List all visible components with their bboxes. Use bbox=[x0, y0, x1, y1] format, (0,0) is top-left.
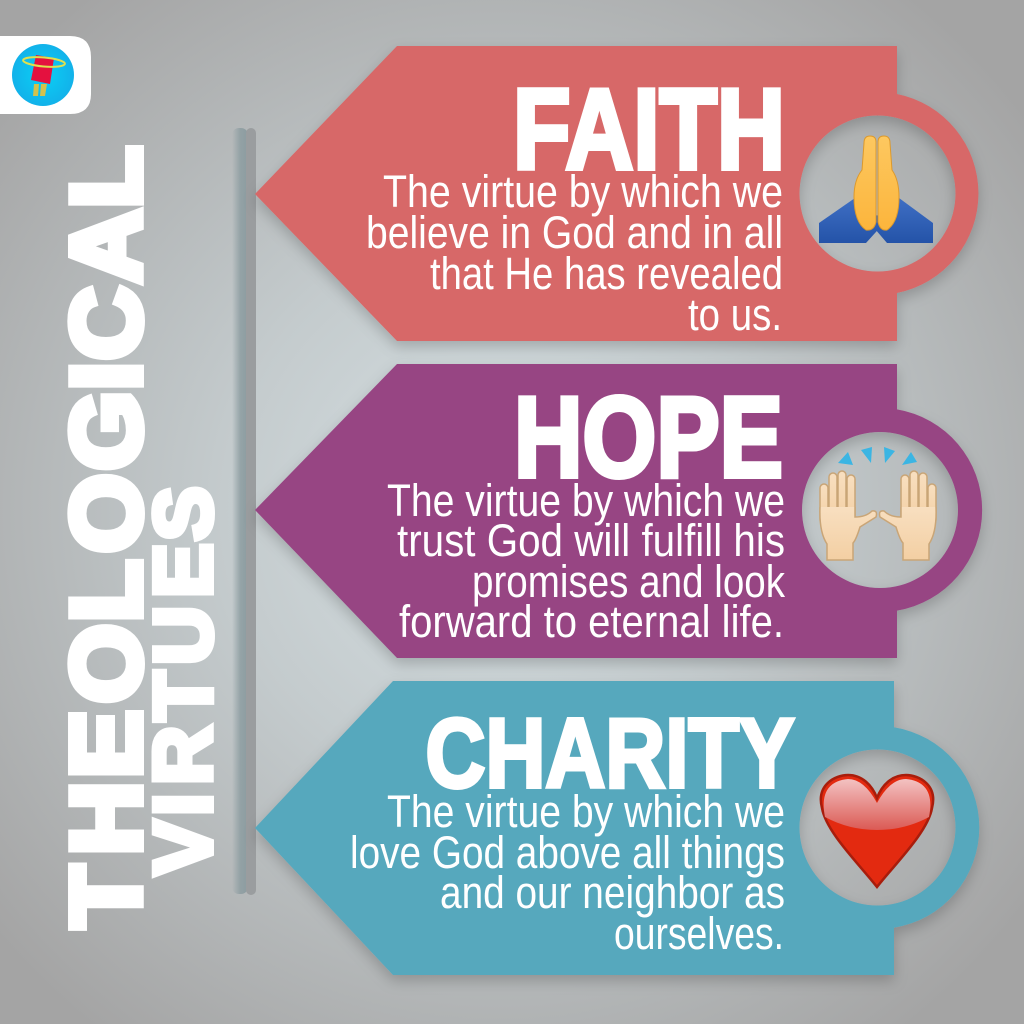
faith description: The virtue by which we bbox=[383, 166, 783, 217]
title line: VIRTUES: VIRTUES bbox=[138, 486, 229, 875]
charity description: The virtue by which we bbox=[387, 786, 785, 837]
hope description: The virtue by which we bbox=[387, 475, 785, 526]
vertical title: THEOLOGICAL VIRTUES bbox=[52, 146, 229, 928]
panel: charity bbox=[255, 681, 979, 975]
faith description: that He has revealed bbox=[430, 248, 783, 299]
heading: hope: HOPE bbox=[514, 374, 783, 502]
title line: THEOLOGICAL: THEOLOGICAL bbox=[52, 146, 162, 928]
hope description: forward to eternal life. bbox=[399, 596, 784, 647]
panel: faith bbox=[255, 46, 978, 341]
faith description: to us. bbox=[688, 289, 782, 340]
sparkles bbox=[838, 447, 917, 465]
charity description: ourselves. bbox=[614, 908, 784, 959]
icon: raised hands bbox=[820, 447, 936, 560]
heading: charity: CHARITY bbox=[426, 698, 794, 808]
charity description: love God above all things bbox=[350, 827, 785, 878]
hope description: trust God will fulfill his bbox=[397, 515, 785, 566]
faith description: believe in God and in all bbox=[366, 207, 783, 258]
faith banner with icon ring bbox=[255, 46, 978, 341]
icon: praying hands bbox=[819, 136, 933, 243]
charity banner with icon ring bbox=[255, 681, 979, 975]
hope description: promises and look bbox=[472, 556, 785, 607]
icon: red heart bbox=[821, 775, 933, 887]
hope description bbox=[387, 475, 785, 647]
panel: hope bbox=[255, 364, 982, 658]
vertical divider bar bbox=[232, 128, 256, 895]
left hand bbox=[820, 471, 876, 560]
heading: faith: FAITH bbox=[513, 66, 785, 194]
charity description: and our neighbor as bbox=[440, 867, 785, 918]
right hand bbox=[880, 471, 936, 560]
faith description bbox=[366, 166, 783, 340]
charity description bbox=[350, 786, 785, 959]
hope banner with icon ring bbox=[255, 364, 982, 658]
logo badge bbox=[0, 36, 91, 114]
